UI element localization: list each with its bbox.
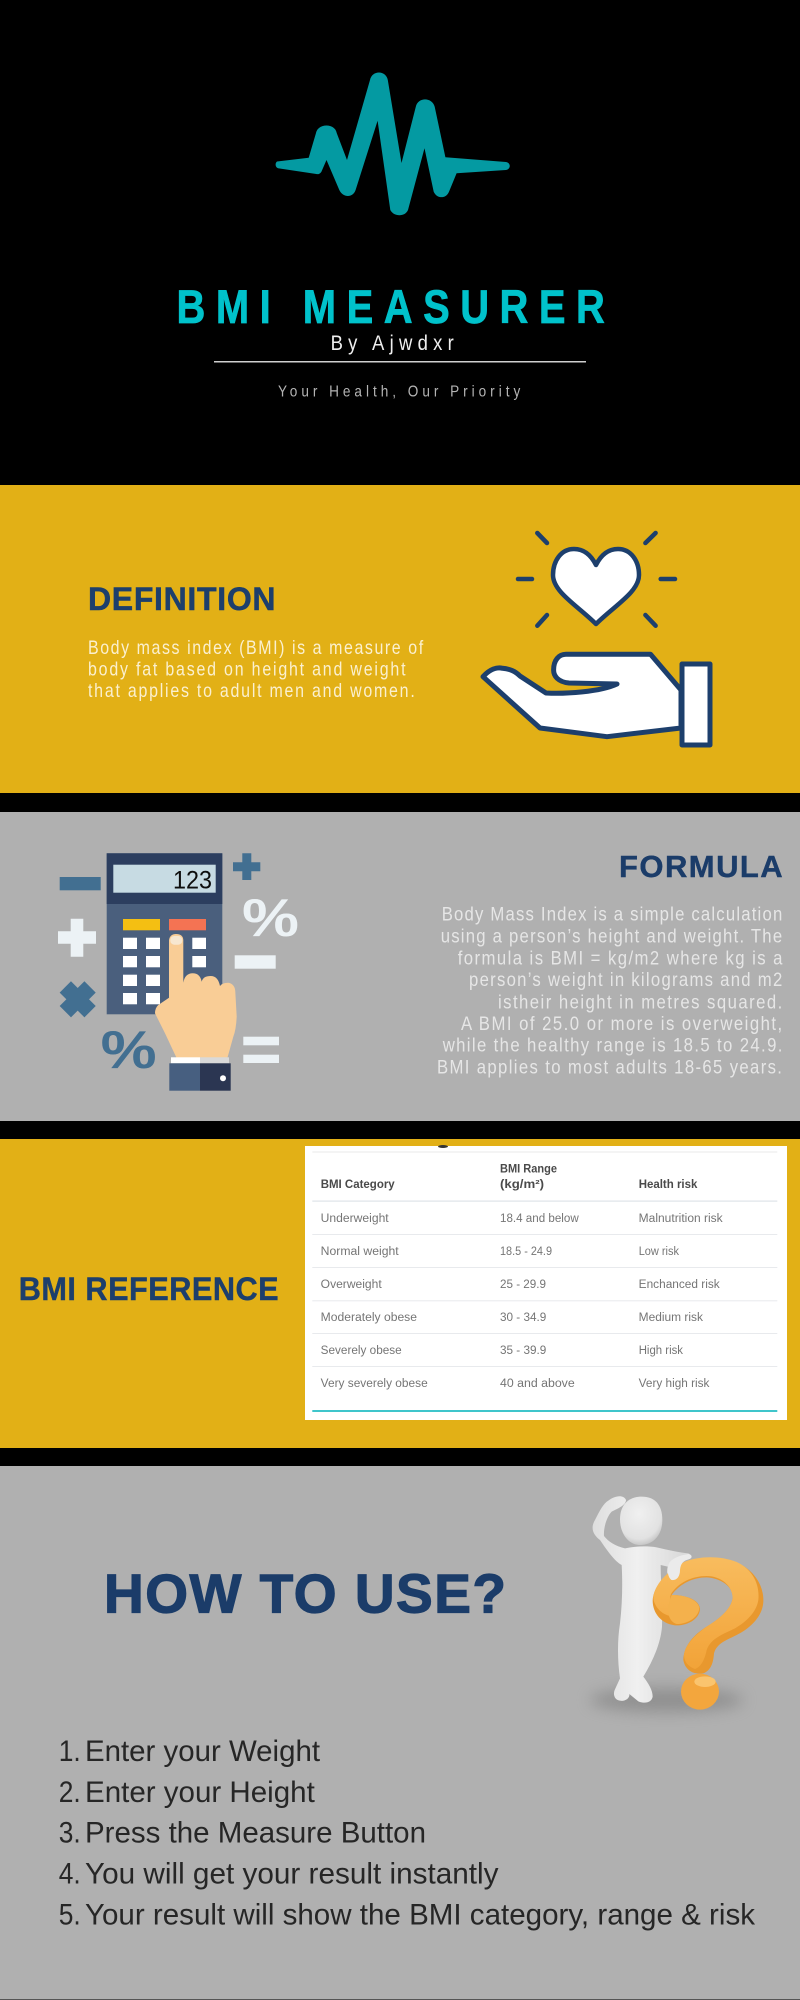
table: BMI categories: Medium risk (639, 1312, 703, 1324)
definition text: Body mass index (BMI) is a measure of (88, 637, 423, 658)
panel: how to use (0, 1466, 800, 2000)
table: BMI categories: (kg/m²) (500, 1179, 544, 1191)
definition text: that applies to adult men and women. (88, 680, 415, 701)
heading: BMI reference: BMI REFERENCE (19, 1271, 279, 1307)
table: BMI categories: Enchanced risk (639, 1279, 720, 1291)
panel: header (0, 0, 800, 485)
formula text: istheir height in metres squared. (498, 991, 782, 1013)
title: BMI MEASURER (176, 282, 605, 334)
panel: BMI reference (0, 1139, 800, 1448)
formula text: formula is BMI = kg/m2 where kg is a (458, 947, 782, 969)
subtitle: By Ajwdxr (331, 332, 454, 355)
step 3: Press the Measure Button (85, 1817, 426, 1850)
formula text: using a person’s height and weight. The (441, 925, 782, 947)
heading: definition: DEFINITION (88, 581, 276, 617)
table: BMI categories: Normal weight (321, 1246, 400, 1258)
icon: heartbeat logo (276, 72, 510, 215)
formula text (437, 904, 782, 1078)
formula text: while the healthy range is 18.5 to 24.9. (442, 1035, 782, 1056)
person (593, 1496, 692, 1703)
table: BMI categories: Very high risk (639, 1378, 710, 1390)
table: BMI categories: Low risk (639, 1246, 679, 1258)
icon: calculator with hand: % (101, 1021, 157, 1080)
step 1: 1. (59, 1735, 81, 1768)
formula text: Body Mass Index is a simple calculation (442, 904, 782, 925)
step 2: Enter your Height (85, 1776, 315, 1809)
step 3: 3. (59, 1817, 81, 1850)
step 5: 5. (59, 1898, 81, 1931)
table: BMI categories: 35 - 39.9 (500, 1345, 546, 1357)
formula text: person’s weight in kilograms and m2 (469, 969, 782, 990)
heading: formula: FORMULA (619, 849, 783, 884)
icon: calculator with hand (53, 853, 299, 1091)
table: BMI categories: 40 and above (500, 1378, 575, 1390)
step 1: Enter your Weight (85, 1735, 321, 1768)
table: BMI categories: Severely obese (321, 1345, 402, 1357)
steps list (59, 1735, 756, 1931)
table: BMI categories: BMI Range (500, 1163, 557, 1175)
icon: calculator with hand: % (242, 889, 299, 948)
tagline: Your Health, Our Priority (278, 384, 521, 401)
table: BMI categories: Underweight (321, 1213, 390, 1225)
step 5: Your result will show the BMI category, range & risk (85, 1898, 756, 1931)
step 4: You will get your result instantly (85, 1857, 498, 1890)
heading: how to use: HOW TO USE? (104, 1563, 506, 1625)
table: BMI categories: Health risk (639, 1179, 698, 1191)
table: BMI categories: High risk (639, 1345, 683, 1357)
table: BMI categories: 25 - 29.9 (500, 1279, 546, 1291)
panel: formula (0, 812, 800, 1121)
definition text (88, 637, 423, 701)
formula text: BMI applies to most adults 18-65 years. (437, 1056, 782, 1078)
table: BMI categories: Overweight (321, 1279, 383, 1291)
question mark (653, 1554, 763, 1710)
table: BMI categories: Very severely obese (321, 1378, 428, 1390)
table: BMI categories: Malnutrition risk (639, 1213, 723, 1225)
table: BMI categories: 18.5 - 24.9 (500, 1246, 552, 1258)
table: BMI categories: BMI Category (321, 1179, 395, 1191)
icon: heart in hand (483, 533, 710, 745)
icon: calculator with hand: 123 (173, 866, 212, 894)
illustration: person leaning on question mark (590, 1496, 763, 1712)
definition text: body fat based on height and weight (88, 658, 406, 680)
table: BMI categories: 30 - 34.9 (500, 1312, 546, 1324)
table: BMI categories: 18.4 and below (500, 1213, 579, 1225)
formula text: A BMI of 25.0 or more is overweight, (461, 1013, 782, 1034)
table: BMI categories: Moderately obese (321, 1312, 417, 1324)
table: BMI categories (305, 1145, 787, 1420)
step 4: 4. (59, 1857, 81, 1890)
step 2: 2. (59, 1776, 81, 1809)
panel: definition (0, 485, 800, 793)
